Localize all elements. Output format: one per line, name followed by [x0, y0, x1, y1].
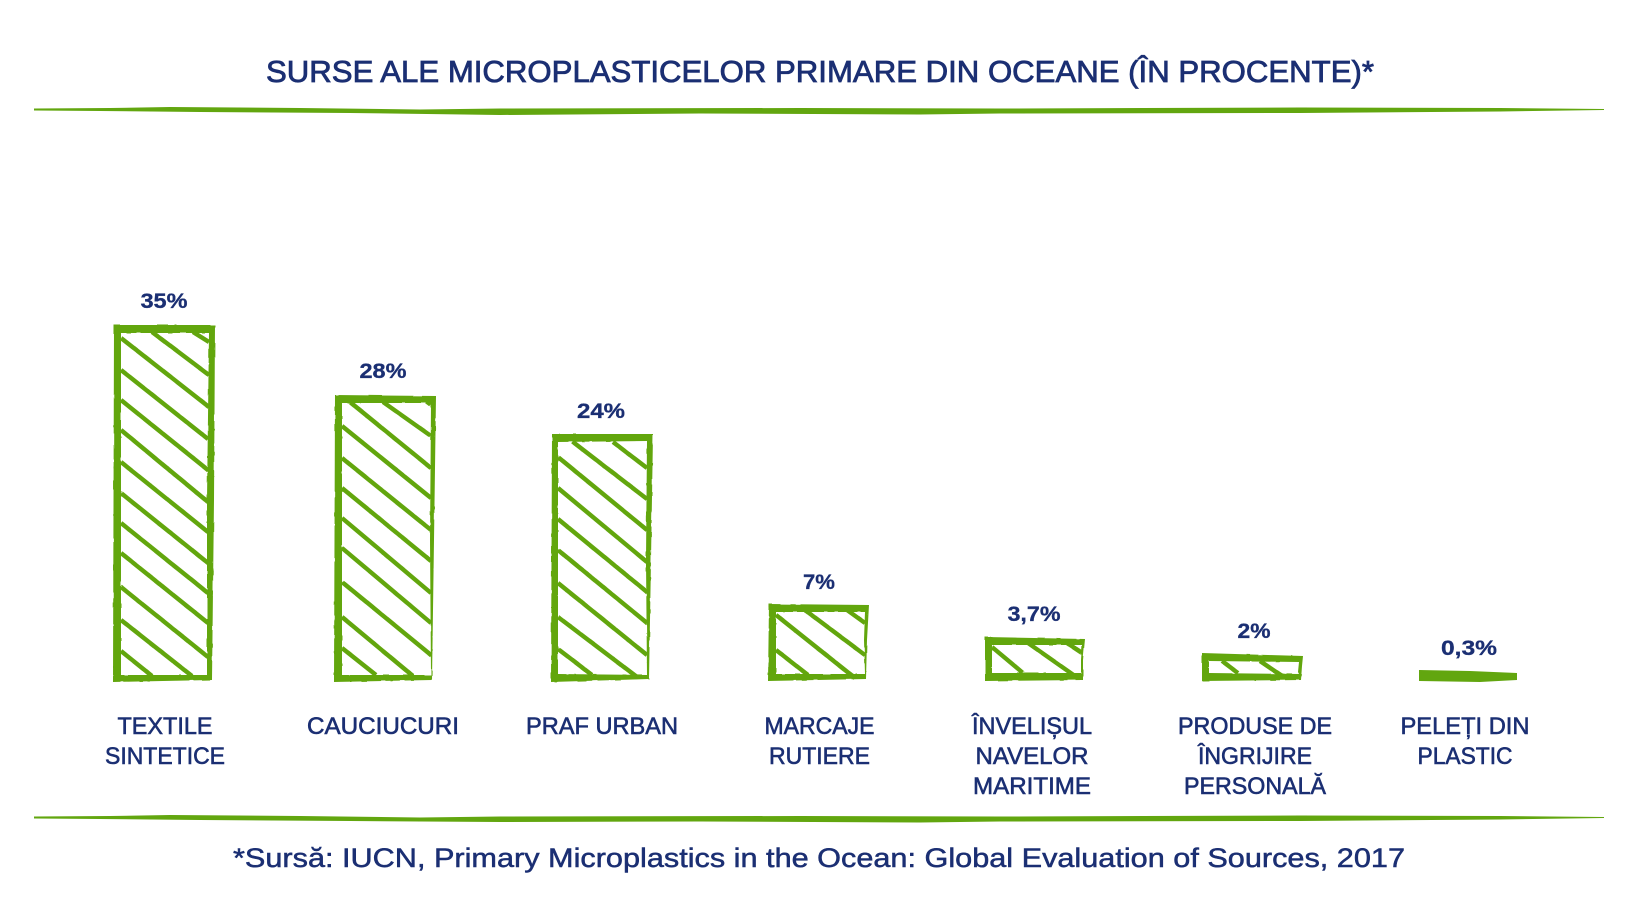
bar chart [105, 290, 1530, 800]
bar: 7% [768, 604, 869, 681]
category label: PELEȚI DIN [1400, 713, 1530, 740]
top brush divider [34, 107, 1604, 115]
bar: 24% [551, 434, 653, 682]
category label: ÎNGRIJIRE [1197, 743, 1312, 770]
bar: 28% [334, 395, 436, 682]
category label: PRAF URBAN [526, 713, 678, 740]
category label: SINTETICE [105, 743, 225, 770]
bar: 3,7% [985, 637, 1085, 681]
column: produse de ingrijire personala [1178, 620, 1332, 800]
bar: 35% [113, 325, 215, 682]
value: 0,3%: 0,3% [1441, 637, 1497, 660]
category label: MARITIME [973, 773, 1091, 800]
bar: 2% [1202, 653, 1303, 681]
value: 3,7%: 3,7% [1008, 603, 1061, 626]
category label: MARCAJE [764, 713, 874, 740]
value: 35%: 35% [140, 290, 188, 313]
category label: PLASTIC [1418, 743, 1512, 770]
bottom brush divider [34, 815, 1604, 822]
column: peleti din plastic [1400, 637, 1530, 770]
category label: CAUCIUCURI [307, 713, 459, 740]
column: cauciucuri [307, 360, 459, 740]
column: textile sintetice [105, 290, 225, 770]
value: 24%: 24% [577, 400, 625, 423]
value: 2%: 2% [1238, 620, 1271, 643]
column: marcaje rutiere [764, 571, 874, 770]
column: invelisul navelor maritime [971, 603, 1092, 800]
category label: PRODUSE DE [1178, 713, 1332, 740]
category label: RUTIERE [769, 743, 870, 770]
value: 7%: 7% [803, 571, 835, 594]
source footnote: *Sursă: IUCN, Primary Microplastics in the Ocean: Global Evaluation of Sources, 2017 [233, 843, 1405, 873]
bar: 0,3% [1419, 670, 1517, 682]
column: praf urban [526, 400, 678, 740]
category label: NAVELOR [976, 743, 1088, 770]
category label: PERSONALĂ [1184, 773, 1326, 800]
category label: ÎNVELIȘUL [971, 713, 1092, 740]
title: SURSE ALE MICROPLASTICELOR PRIMARE DIN OCEANE (ÎN PROCENTE)* [266, 54, 1374, 89]
category label: TEXTILE [118, 713, 212, 740]
value: 28%: 28% [360, 360, 407, 383]
